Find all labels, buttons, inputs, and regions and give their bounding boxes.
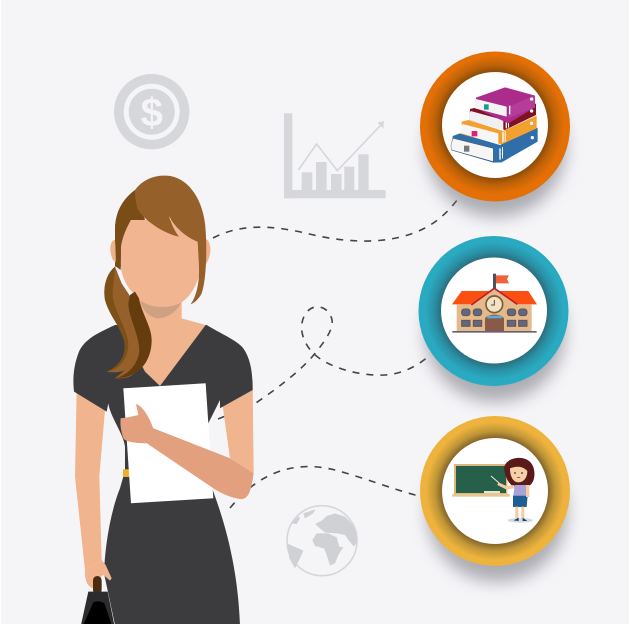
dashed connector: teacher bbox=[230, 467, 419, 508]
icon: globe bbox=[287, 506, 357, 576]
icon: dollar coin bbox=[114, 74, 189, 149]
shadow: teacher badge bbox=[427, 442, 567, 582]
dashed connector: school loop bbox=[218, 307, 430, 419]
ears bbox=[110, 238, 210, 265]
left arm bbox=[75, 390, 105, 570]
woman figure bbox=[73, 176, 254, 625]
hair front bbox=[135, 176, 206, 304]
neck shadow bbox=[140, 302, 182, 318]
ponytail bbox=[104, 267, 140, 378]
icon: dollar coin: $ bbox=[141, 91, 163, 135]
icon: teacher at blackboard bbox=[452, 458, 534, 523]
shadow: books badge bbox=[426, 77, 566, 217]
hand on bag bbox=[85, 560, 112, 588]
forearm and hand bbox=[120, 404, 254, 499]
bag front bbox=[83, 601, 112, 625]
hair back bbox=[115, 190, 160, 270]
shadow: school badge bbox=[425, 262, 565, 402]
belt bbox=[123, 469, 130, 477]
right arm upper bbox=[220, 380, 254, 473]
badge: school bbox=[418, 236, 568, 386]
bag handle bbox=[93, 576, 103, 594]
paper bbox=[123, 383, 213, 503]
face bbox=[121, 220, 200, 307]
badge: teacher bbox=[420, 416, 570, 566]
hair side bbox=[115, 190, 137, 270]
dress bbox=[73, 325, 253, 625]
icon: school building bbox=[452, 274, 537, 333]
ponytail dark strand bbox=[115, 292, 152, 378]
badge: books bbox=[420, 52, 570, 202]
icon: growth chart bbox=[284, 113, 386, 198]
neck and chest bbox=[127, 297, 206, 386]
icon: stack of books bbox=[451, 87, 538, 163]
bag bbox=[81, 592, 114, 625]
dashed connector: books bbox=[213, 195, 461, 241]
ponytail mid strand bbox=[104, 267, 128, 372]
